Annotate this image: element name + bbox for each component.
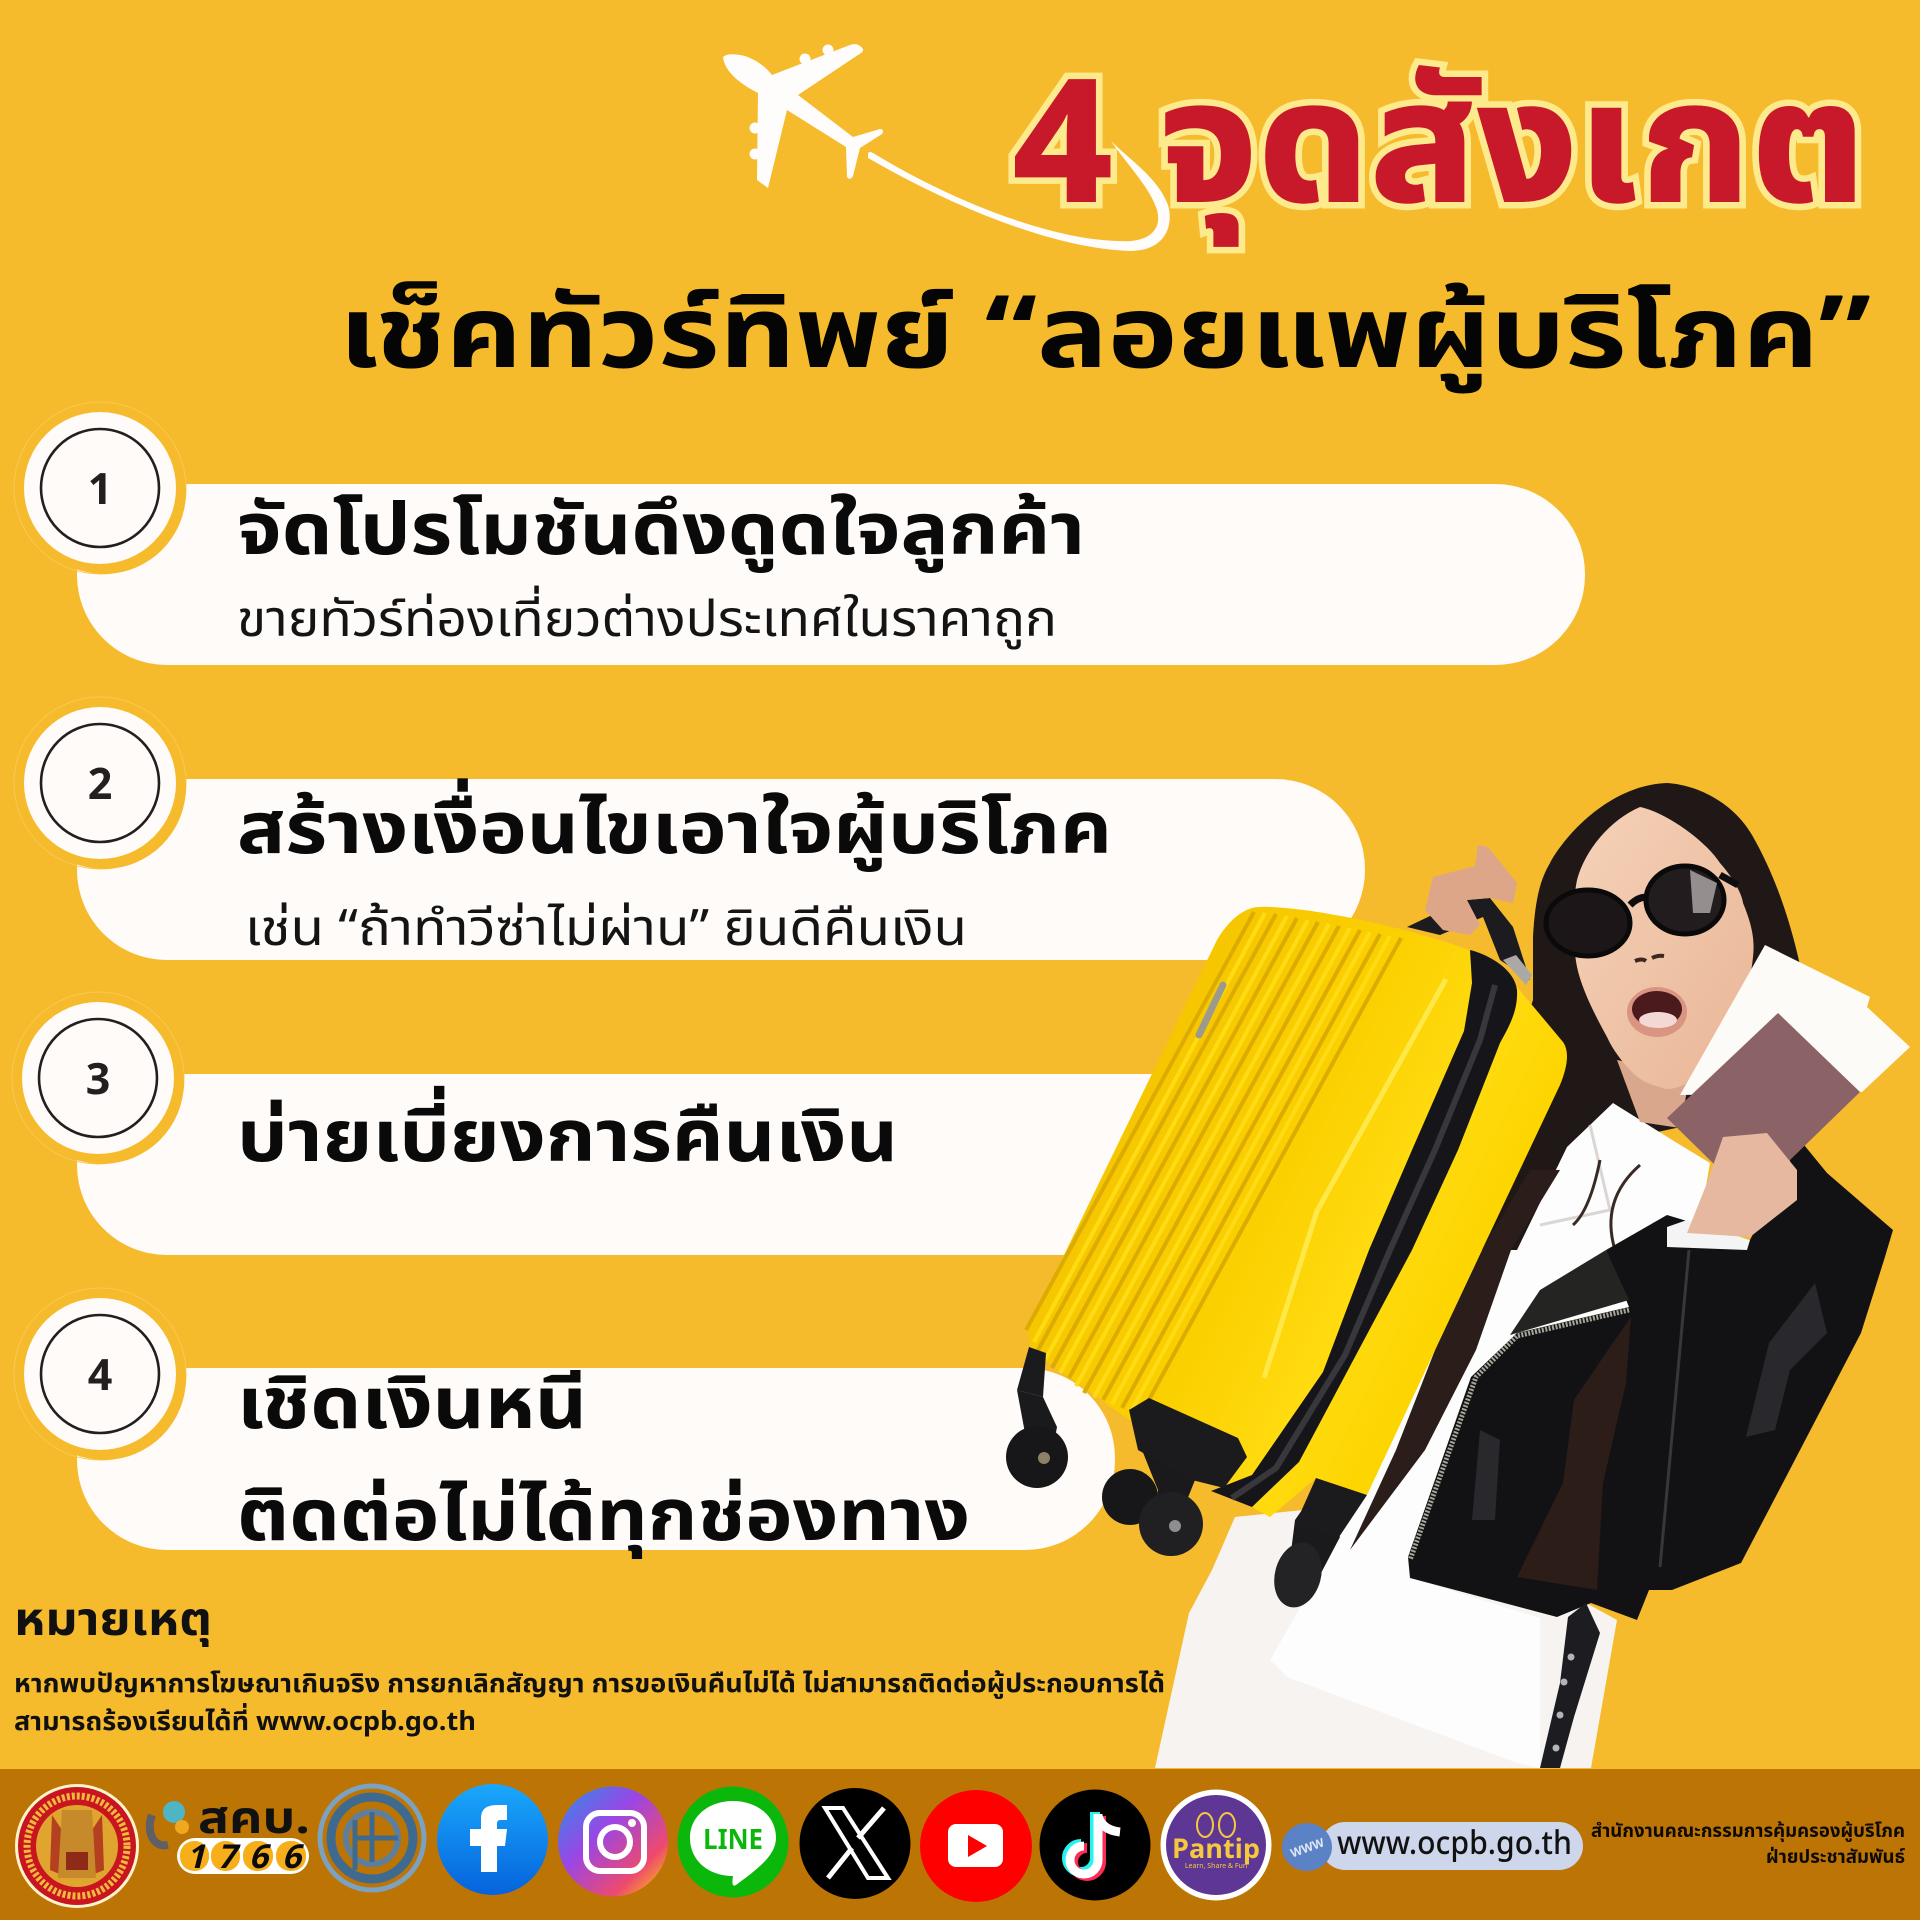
hair strand over shirt xyxy=(1350,1170,1560,1550)
suitcase shell xyxy=(1028,907,1567,1517)
panel: item 2: เช่น “ถ้าทำวีซ่าไม่ผ่าน” ยินดีคืนเงิน xyxy=(245,892,967,968)
panel: item 1: จัดโปรโมชันดึงดูดใจลูกค้า xyxy=(237,479,1085,587)
panel: item 2: 2 xyxy=(88,754,112,819)
title: 4 จุดสังเกต: 4 จุดสังเกต xyxy=(1012,21,1866,280)
icon: TikTok xyxy=(1040,1790,1150,1900)
wheels xyxy=(1006,1390,1340,1613)
nostrils xyxy=(1635,956,1664,961)
hair over jacket xyxy=(1517,1317,1631,1590)
cuff xyxy=(1667,1220,1750,1250)
passport xyxy=(1667,1013,1860,1167)
icon: Pantip: Learn, Share & Fun xyxy=(1185,1862,1247,1872)
logo: OCPB rings xyxy=(320,1786,424,1890)
mouth xyxy=(1627,987,1687,1037)
suitcase zipper band xyxy=(1211,950,1517,1507)
face xyxy=(1573,807,1754,1089)
panel: item 3 xyxy=(12,992,1240,1255)
logo: สคบ 1766 xyxy=(150,1786,310,1883)
note block: หมายเหตุ xyxy=(14,1586,212,1656)
panel: item 2 xyxy=(14,697,1365,968)
illustration: woman holding suitcase xyxy=(1006,783,1910,1768)
icon: YouTube xyxy=(920,1790,1032,1902)
icon: LINE xyxy=(678,1786,788,1898)
note block: สามารถร้องเรียนได้ที่ www.ocpb.go.th xyxy=(14,1702,476,1742)
icon: LINE: LINE xyxy=(703,1819,763,1862)
icon: Pantip: Pantip xyxy=(1172,1830,1260,1871)
footer band xyxy=(0,1769,1920,1920)
footer agency text: สำนักงานคณะกรรมการคุ้มครองผู้บริโภค xyxy=(1591,1817,1905,1846)
zipper detail xyxy=(1232,985,1495,1498)
suitcase top handle xyxy=(1407,898,1530,980)
website pill: WWW xyxy=(1288,1834,1327,1863)
icon: Facebook xyxy=(437,1784,548,1895)
sunglasses xyxy=(1546,866,1738,956)
subtitle: เช็คทัวร์ทิพย์ “ลอยแพผู้บริโภค” xyxy=(339,261,1871,412)
icon: X xyxy=(800,1788,910,1899)
white shirt xyxy=(1270,1103,1710,1768)
panel: item 1 xyxy=(14,402,1585,665)
panel: item 1: 1 xyxy=(88,459,112,524)
panel: item 4: เชิดเงินหนี xyxy=(237,1353,587,1461)
hand on handle xyxy=(1425,845,1517,935)
note block: หากพบปัญหาการโฆษณาเกินจริง การยกเลิกสัญญา การขอเงินคืนไม่ได้ ไม่สามารถติดต่อผู้ประกอบการได้ xyxy=(14,1664,1165,1704)
jacket highlights xyxy=(1510,1250,1629,1335)
logo: สคบ 1766: 1766 xyxy=(186,1833,305,1883)
note block xyxy=(14,1586,1165,1742)
leather jacket xyxy=(1408,1140,1893,1620)
panel: item 3: บ่ายเบี่ยงการคืนเงิน xyxy=(237,1086,898,1194)
hair back xyxy=(1480,783,1800,1250)
neck xyxy=(1617,1060,1690,1128)
panel: item 4: ติดต่อไม่ได้ทุกช่องทาง xyxy=(237,1465,970,1573)
panel: item 3: 3 xyxy=(86,1049,110,1114)
hand with passport xyxy=(1687,1133,1797,1237)
suitcase grey slit xyxy=(1199,985,1223,1035)
trousers xyxy=(1155,1500,1617,1768)
belt xyxy=(1540,1603,1600,1768)
panel: item 4: 4 xyxy=(88,1345,112,1410)
website pill: www.ocpb.go.th xyxy=(1337,1819,1572,1869)
icon: consumer protection board seal xyxy=(15,1784,139,1908)
icon: Pantip xyxy=(1160,1790,1272,1900)
footer agency text: ฝ่ายประชาสัมพันธ์ xyxy=(1766,1843,1905,1872)
belt eyelets xyxy=(1552,1654,1574,1752)
fine hair strands on shirt xyxy=(1573,1160,1640,1250)
tickets xyxy=(1680,945,1910,1095)
jacket zipper xyxy=(1410,1310,1629,1560)
suitcase highlight xyxy=(1264,979,1446,1378)
suitcase ribs xyxy=(1026,912,1401,1418)
panel: item 1: ขายทัวร์ท่องเที่ยวต่างประเทศในราคาถูก xyxy=(237,583,1057,659)
shirt collar shadow xyxy=(1540,1125,1610,1225)
icon: Instagram xyxy=(558,1786,668,1896)
footer agency text xyxy=(1591,1817,1905,1872)
handle bracket xyxy=(1503,955,1532,985)
icon: airplane with swoosh xyxy=(723,44,1170,251)
panel: item 2: สร้างเงื่อนไขเอาใจผู้บริโภค xyxy=(237,778,1112,886)
panel: item 4 xyxy=(14,1288,1115,1573)
logo: สคบ 1766: สคบ. xyxy=(198,1786,310,1853)
suitcase corners xyxy=(1017,1347,1367,1537)
